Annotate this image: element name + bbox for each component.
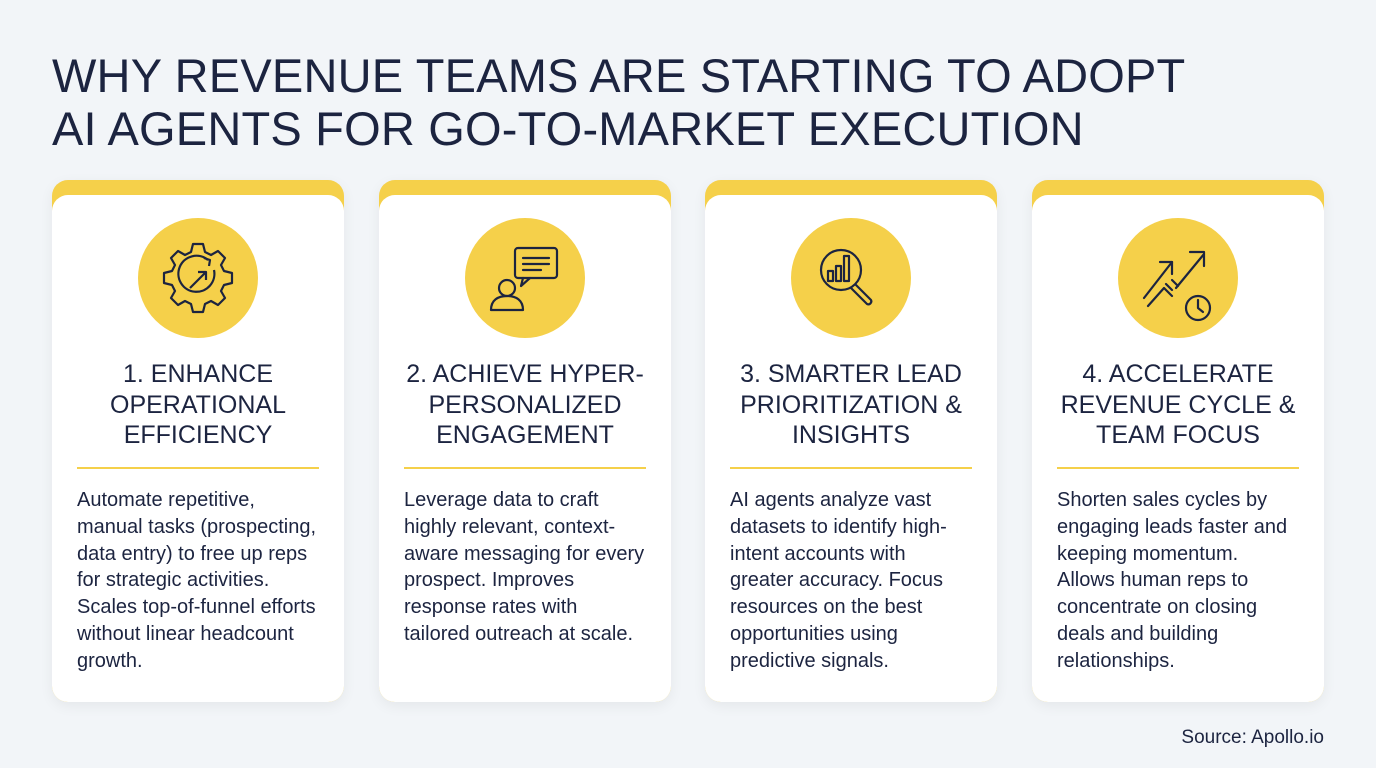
source: Source: Apollo.io bbox=[1181, 727, 1324, 748]
icon: person chat bbox=[465, 218, 585, 338]
text: Leverage data to craft highly relevant, context-aware messaging for every prospect. Improves response rates with tailored outreach at scale. bbox=[404, 489, 644, 645]
title bbox=[52, 49, 1185, 155]
heading: 3. SMARTER LEAD bbox=[740, 360, 962, 388]
heading: EFFICIENCY bbox=[124, 421, 272, 449]
heading: PERSONALIZED bbox=[428, 390, 622, 418]
heading bbox=[1061, 360, 1296, 449]
panel: lead prioritization bbox=[705, 180, 997, 702]
text: Automate repetitive, manual tasks (prospecting, data entry) to free up reps for strategic activities. Scales top-of-funnel efforts without linear headcount growth. bbox=[77, 489, 316, 672]
icon: arrows clock bbox=[1118, 218, 1238, 338]
title: AI AGENTS FOR GO-TO-MARKET EXECUTION bbox=[52, 102, 1084, 155]
heading: INSIGHTS bbox=[792, 421, 910, 449]
heading: 1. ENHANCE bbox=[123, 360, 273, 388]
heading: ENGAGEMENT bbox=[436, 421, 614, 449]
text: Shorten sales cycles by engaging leads faster and keeping momentum. Allows human reps to concentrate on closing deals and building relationships. bbox=[1057, 489, 1287, 672]
heading: PRIORITIZATION & bbox=[740, 390, 962, 418]
text: AI agents analyze vast datasets to identify high-intent accounts with greater accuracy. Focus resources on the best opportunities using predictive signals. bbox=[730, 489, 947, 672]
panel: revenue cycle bbox=[1032, 180, 1324, 702]
icon: magnifier chart bbox=[791, 218, 911, 338]
heading: OPERATIONAL bbox=[110, 390, 286, 418]
title: WHY REVENUE TEAMS ARE STARTING TO ADOPT bbox=[52, 49, 1185, 102]
heading: 2. ACHIEVE HYPER- bbox=[406, 360, 644, 388]
heading bbox=[740, 360, 962, 449]
heading bbox=[406, 360, 644, 449]
panel: operational efficiency bbox=[52, 180, 344, 702]
icon: gear bbox=[138, 218, 258, 338]
heading: REVENUE CYCLE & bbox=[1061, 390, 1295, 418]
heading: TEAM FOCUS bbox=[1096, 421, 1260, 449]
heading bbox=[110, 360, 286, 449]
panel: personalized engagement bbox=[379, 180, 671, 702]
heading: 4. ACCELERATE bbox=[1082, 360, 1274, 388]
